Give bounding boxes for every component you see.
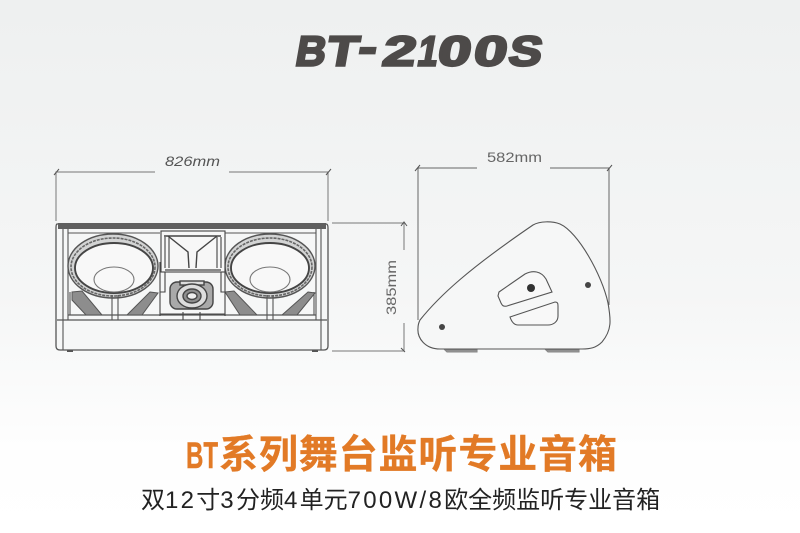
title: model name: B	[292, 28, 331, 74]
horn	[160, 231, 225, 316]
handle lower	[510, 302, 558, 325]
title: model name: 0	[470, 28, 512, 74]
heading: 系列舞台监听专业音箱	[219, 434, 617, 477]
side cabinet outline	[418, 222, 610, 349]
right woofer	[225, 234, 315, 298]
cabinet feet	[67, 350, 318, 352]
feet	[445, 350, 579, 352]
top band	[58, 223, 326, 229]
bolts	[527, 284, 535, 292]
dimension: side depth 582mm	[415, 149, 612, 320]
compression driver	[160, 281, 225, 320]
dimension: height 385mm: 385mm	[383, 260, 399, 315]
heading: BT	[186, 435, 218, 476]
speaker front view	[56, 223, 328, 351]
handle upper	[498, 272, 552, 306]
speaker side view	[418, 222, 610, 352]
cabinet side rails	[63, 229, 321, 350]
woofer struts	[70, 291, 315, 320]
dimension: front width 826mm	[54, 153, 331, 221]
dimension: side depth 582mm: 582mm	[487, 149, 542, 165]
title: model name: S	[505, 28, 547, 74]
left woofer	[68, 234, 158, 298]
dimension: front width 826mm: 826mm	[165, 153, 220, 169]
dimension: height 385mm	[332, 222, 407, 352]
cabinet outline	[56, 224, 328, 350]
bottom panel	[57, 315, 327, 320]
title: model name: T	[323, 28, 363, 74]
title: model name: 2	[379, 28, 421, 74]
title: model name	[292, 24, 547, 74]
title: model name: 0	[434, 28, 476, 74]
title: model name: 1	[414, 28, 443, 74]
subtitle: 双12寸3分频4单元700W/8欧全频监听专业音箱	[141, 487, 660, 514]
title: model name: -	[355, 24, 381, 70]
